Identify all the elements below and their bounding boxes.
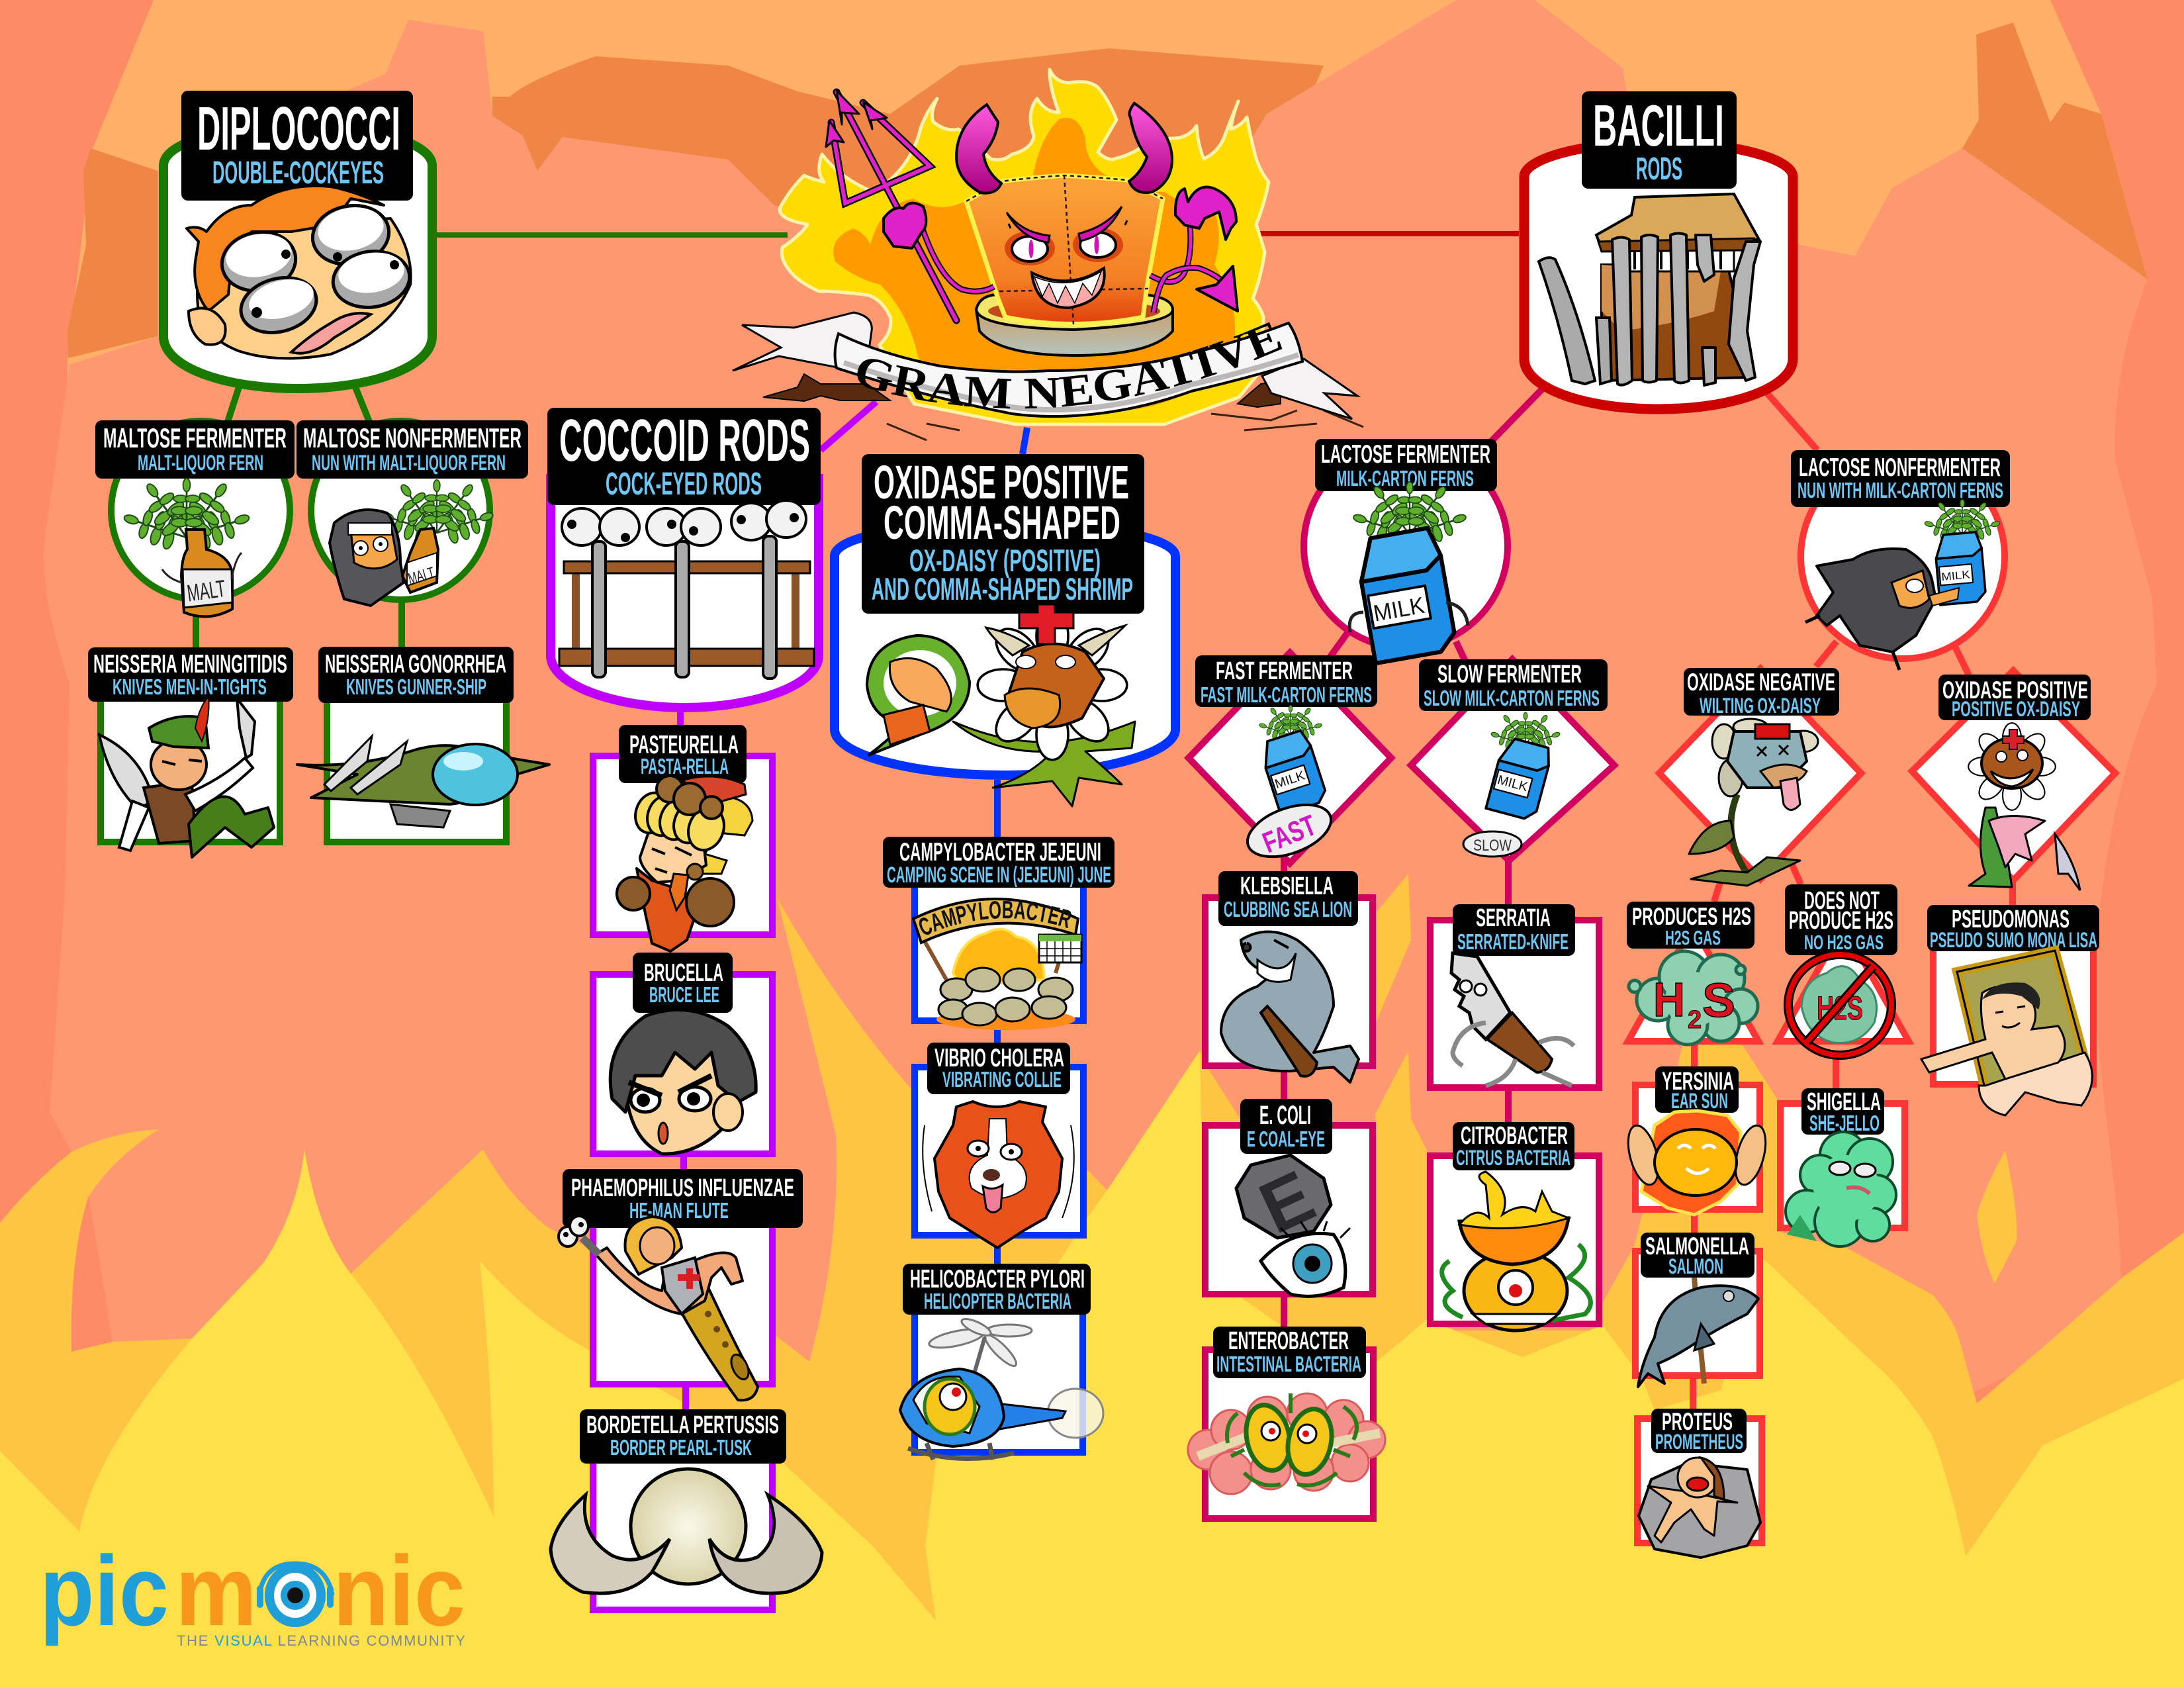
tail <box>1154 267 1224 312</box>
label: PSEUDOMONAS <box>1952 906 2070 933</box>
label <box>88 647 293 702</box>
icon: camp fire with banner and calendar: CAMPYLOBACTER <box>919 901 1071 935</box>
label <box>1315 439 1497 491</box>
eyes <box>1005 207 1127 265</box>
label: VIBRIO CHOLERA <box>934 1044 1064 1072</box>
panel: coccoid rods <box>547 408 821 708</box>
ground cracks thin <box>887 410 1363 440</box>
label <box>1641 1233 1754 1278</box>
heading: coccoid rods <box>547 408 821 505</box>
label: PASTEURELLA <box>629 731 739 759</box>
heading: oxidase positive comma-shaped: AND COMMA-SHAPED SHRIMP <box>872 571 1133 606</box>
icon: h2s gas cloud: H <box>1653 974 1685 1027</box>
panel: oxidase negative <box>1659 668 1861 886</box>
label: PHAEMOPHILUS INFLUENZAE <box>571 1174 794 1202</box>
panel: e. coli <box>1205 1099 1373 1296</box>
panel: oxidase positive comma-shaped <box>835 454 1175 806</box>
icon: sea lion with club <box>1221 932 1359 1082</box>
label: NUN WITH MALT-LIQUOR FERN <box>312 451 506 475</box>
label <box>563 1169 803 1228</box>
label: CITRUS BACTERIA <box>1456 1146 1570 1170</box>
icon: ear sun <box>1623 1111 1771 1215</box>
label: MILK-CARTON FERNS <box>1336 466 1474 491</box>
label <box>1453 1122 1574 1170</box>
frying pan <box>976 310 1173 355</box>
logo: picmonic <box>40 1535 465 1649</box>
sponge body <box>966 175 1163 324</box>
arms and hands <box>923 224 1191 291</box>
panel: fast fermenter <box>1189 653 1391 867</box>
frame <box>1637 1419 1762 1543</box>
panel: pasteurella <box>593 725 772 951</box>
label: CAMPING SCENE IN (JEJEUNI) JUNE <box>887 863 1111 888</box>
circle frame <box>1801 455 2005 659</box>
icon: cross-eyed rods in a rack <box>559 500 814 679</box>
label: SERRATED-KNIFE <box>1457 929 1569 954</box>
banner text path <box>852 346 1289 408</box>
triangle frame <box>1628 925 1758 1041</box>
label: NO H2S GAS <box>1804 931 1884 954</box>
heading: bacilli: RODS <box>1636 152 1682 187</box>
logo: picmonic: pic <box>40 1535 169 1646</box>
frame <box>1205 898 1373 1066</box>
icon: no h2s sign: H2S <box>1817 990 1863 1027</box>
icon: coal and eye: E <box>1248 1155 1326 1249</box>
barrel frame <box>1524 142 1793 409</box>
trident <box>831 92 956 320</box>
label: BRUCELLA <box>644 959 723 987</box>
frame <box>327 692 506 842</box>
barrel frame <box>835 523 1175 775</box>
label <box>1938 675 2091 721</box>
label <box>580 1409 786 1464</box>
label: OXIDASE NEGATIVE <box>1687 669 1835 696</box>
icon: robin hood with knives <box>99 696 274 857</box>
panel: serratia <box>1430 904 1599 1088</box>
mouth <box>1032 268 1105 308</box>
icon: nun with malt bottle and fern <box>330 476 498 606</box>
panel: maltose nonfermenter <box>296 420 528 606</box>
icon: pearl with tusks <box>551 1469 822 1593</box>
label: PROMETHEUS <box>1655 1430 1743 1454</box>
label <box>1684 668 1839 718</box>
label: CAMPYLOBACTER JEJEUNI <box>899 838 1101 867</box>
frame <box>593 974 772 1154</box>
label: CITROBACTER <box>1461 1122 1568 1150</box>
label: HELICOBACTER PYLORI <box>910 1265 1085 1293</box>
icon: intestinal bacteria <box>1188 1393 1385 1494</box>
icon: fast milk carton <box>1240 703 1338 867</box>
frame <box>1780 1103 1905 1228</box>
frame <box>915 1307 1083 1452</box>
heading: diplococci: DIPLOCOCCI <box>197 94 400 163</box>
label: WILTING OX-DAISY <box>1700 694 1821 718</box>
label: PRODUCES H2S <box>1632 903 1751 930</box>
label <box>1195 655 1377 707</box>
ribbon tails <box>733 312 1357 419</box>
heading: diplococci <box>181 91 413 201</box>
label: HE-MAN FLUTE <box>629 1198 729 1223</box>
label <box>1791 450 2010 507</box>
triangle frame <box>1778 925 1909 1041</box>
panel: phaemophilus influenzae <box>559 1169 803 1400</box>
icon: fast milk carton: MILK <box>1273 769 1307 792</box>
label <box>1785 884 1897 955</box>
label: BORDER PEARL-TUSK <box>610 1435 752 1460</box>
icon: wilting ox-daisy <box>1689 719 1818 886</box>
label: POSITIVE OX-DAISY <box>1952 697 2080 721</box>
label: DOES NOT <box>1804 887 1880 915</box>
frame <box>593 1201 772 1384</box>
panel: pseudomonas <box>1921 905 2099 1115</box>
label <box>1651 1408 1747 1454</box>
panel: salmonella <box>1635 1233 1760 1387</box>
label: PRODUCE H2S <box>1789 907 1893 935</box>
trident prongs <box>826 91 887 147</box>
label: SALMON <box>1668 1254 1723 1278</box>
heading: diplococci: DOUBLE-COCKEYES <box>212 156 384 191</box>
label: NEISSERIA MENINGITIDIS <box>93 650 287 679</box>
panel: helicobacter pylori <box>900 1264 1103 1460</box>
icon: citrus bacterium <box>1442 1172 1590 1331</box>
label: KLEBSIELLA <box>1240 872 1334 900</box>
label <box>1218 871 1358 926</box>
frame <box>101 692 280 842</box>
panel: campylobacter jejeuni <box>883 837 1115 1030</box>
frame <box>1635 1085 1760 1209</box>
icon: slow milk carton: MILK <box>1496 773 1529 794</box>
label: EAR SUN <box>1671 1089 1728 1113</box>
panel: brucella <box>593 953 772 1154</box>
icon: camp fire with banner and calendar <box>912 898 1083 1030</box>
label: FAST MILK-CARTON FERNS <box>1201 682 1372 707</box>
icon: malt liquor bottle with fern: MALT <box>185 575 227 607</box>
panel: shigella <box>1780 1088 1905 1246</box>
panel: citrobacter <box>1430 1122 1599 1331</box>
frame <box>1933 940 2093 1084</box>
label <box>1927 905 2099 952</box>
icon: coal and eye <box>1236 1155 1350 1296</box>
icon: milk carton with fern: MILK <box>1371 592 1426 627</box>
label: SERRATIA <box>1476 904 1551 932</box>
panel: enterobacter <box>1188 1327 1385 1519</box>
icon: vibrating collie <box>923 1102 1074 1248</box>
frame <box>1635 1251 1760 1376</box>
panel: klebsiella <box>1205 871 1373 1082</box>
label: PROTEUS <box>1662 1408 1733 1435</box>
icon: she-jello <box>1786 1132 1896 1246</box>
label: H2S GAS <box>1665 926 1721 949</box>
icon: salmon <box>1638 1278 1758 1387</box>
label: SALMONELLA <box>1645 1233 1749 1260</box>
label <box>1801 1088 1884 1135</box>
label: SHE-JELLO <box>1809 1111 1880 1135</box>
icon: eye with headphones <box>257 1564 334 1627</box>
label <box>883 837 1115 888</box>
panel: proteus <box>1637 1408 1762 1558</box>
heading: bacilli: BACILLI <box>1593 93 1724 158</box>
label <box>927 1043 1070 1094</box>
label: MALTOSE NONFERMENTER <box>303 422 522 453</box>
label: OXIDASE POSITIVE <box>1942 677 2088 704</box>
label <box>1213 1327 1366 1378</box>
panel: does not produce h2s <box>1778 884 1909 1055</box>
panel: lactose nonfermenter <box>1791 450 2010 670</box>
diamond frame <box>1189 653 1391 863</box>
icon: milk carton with fern <box>1349 478 1471 663</box>
icon: h2s gas cloud <box>1629 951 1758 1045</box>
label <box>1453 904 1575 956</box>
panel: oxidase positive (bacilli branch) <box>1912 671 2115 890</box>
logo: picmonic: nic <box>333 1535 465 1646</box>
label: KNIVES GUNNER-SHIP <box>346 675 486 699</box>
label <box>1419 659 1608 711</box>
label <box>1655 1066 1739 1113</box>
panel: neisseria meningitidis <box>88 647 293 857</box>
diamond frame <box>1912 671 2115 880</box>
icon: pasta rella woman <box>617 776 752 951</box>
label: HELICOPTER BACTERIA <box>924 1289 1071 1313</box>
label <box>296 420 528 479</box>
banner shadow <box>844 355 1298 410</box>
icon: malt liquor bottle with fern <box>119 475 254 616</box>
label: VIBRATING COLLIE <box>942 1067 1062 1092</box>
frame <box>593 756 772 935</box>
label <box>619 725 747 783</box>
diamond frame <box>1411 659 1614 861</box>
icon: bruce lee head <box>610 1009 756 1154</box>
circle frame <box>1304 444 1508 648</box>
icon: serrated knife character <box>1451 953 1574 1086</box>
heading: oxidase positive comma-shaped: COMMA-SHAPED <box>884 497 1120 549</box>
label: LACTOSE FERMENTER <box>1321 440 1490 469</box>
icon: he-man flute <box>559 1216 758 1400</box>
icon: running nun with milk carton <box>1805 497 2003 670</box>
label: CLUBBING SEA LION <box>1224 897 1352 921</box>
label: NEISSERIA GONORRHEA <box>325 650 506 679</box>
heading: bacilli <box>1582 91 1737 189</box>
label: E. COLI <box>1259 1101 1311 1130</box>
panel: maltose fermenter <box>95 420 295 616</box>
ground cracks <box>763 374 1281 407</box>
label: SLOW MILK-CARTON FERNS <box>1424 686 1600 710</box>
label: MALTOSE FERMENTER <box>103 422 287 453</box>
icon: fast milk carton: FAST <box>1258 809 1321 859</box>
barrel frame <box>163 126 432 389</box>
panel: diplococci <box>163 91 432 389</box>
icon: slow milk carton: SLOW <box>1473 837 1512 855</box>
label: FAST FERMENTER <box>1216 657 1353 685</box>
title character: gram negative devil sponge: GRAM NEGATIVE <box>858 322 1283 409</box>
label: SHIGELLA <box>1807 1088 1881 1116</box>
circle frame <box>111 421 290 600</box>
frame <box>1430 1156 1599 1324</box>
panel: lactose fermenter <box>1304 439 1508 663</box>
label: E COAL-EYE <box>1247 1127 1325 1151</box>
icon: running nun with milk carton: MILK <box>1941 568 1970 583</box>
icon: double cross-eyed face <box>187 186 413 358</box>
icon: nun with malt bottle and fern: MALT <box>406 564 437 588</box>
frame <box>915 1067 1083 1235</box>
logo: picmonic: THE VISUAL LEARNING COMMUNITY <box>177 1632 465 1649</box>
label <box>318 647 514 703</box>
horns <box>956 105 1001 193</box>
diamond frame <box>1659 669 1861 879</box>
panel: vibrio cholera <box>915 1043 1083 1248</box>
panel: neisseria gonorrhea <box>297 647 549 842</box>
panel: bacilli <box>1524 91 1793 409</box>
icon: h2s gas cloud: 2 <box>1688 1006 1702 1034</box>
fire behind character <box>780 70 1269 424</box>
label <box>1627 902 1754 949</box>
circle frame <box>311 421 490 600</box>
panel: produces h2s <box>1627 902 1758 1045</box>
icon: helicopter with bacterium <box>900 1316 1103 1460</box>
label <box>1240 1099 1332 1154</box>
icon: smiling daisy with hand <box>1968 723 2080 890</box>
label: MALT-LIQUOR FERN <box>138 451 263 475</box>
icon: h2s gas cloud: S <box>1702 974 1735 1027</box>
label: LACTOSE NONFERMENTER <box>1799 453 2001 482</box>
label: INTESTINAL BACTERIA <box>1216 1352 1361 1376</box>
label: YERSINIA <box>1662 1068 1734 1096</box>
barrel frame <box>551 479 819 708</box>
icon: slow milk carton <box>1463 710 1563 857</box>
label: PASTA-RELLA <box>641 754 729 778</box>
frame <box>593 1453 772 1610</box>
frame <box>1430 920 1599 1088</box>
frame <box>1205 1350 1373 1519</box>
heading: oxidase positive comma-shaped: OXIDASE POSITIVE <box>874 457 1129 509</box>
heading: oxidase positive comma-shaped <box>862 454 1144 614</box>
logo: picmonic: m <box>175 1535 257 1646</box>
icon: prometheus on rock <box>1639 1458 1760 1558</box>
frame <box>915 880 1083 1021</box>
label: ENTEROBACTER <box>1228 1327 1349 1355</box>
label <box>95 420 295 479</box>
label: SLOW FERMENTER <box>1437 661 1582 688</box>
frame <box>1205 1125 1373 1294</box>
icon: comma shrimp and ox-daisy <box>867 604 1135 806</box>
label: BORDETELLA PERTUSSIS <box>586 1411 779 1439</box>
heading: coccoid rods: COCK-EYED RODS <box>606 467 762 502</box>
title character: gram negative devil sponge <box>732 68 1363 441</box>
icon: broken rods cage <box>1539 194 1760 385</box>
icon: sumo mona lisa <box>1921 951 2092 1115</box>
label: BRUCE LEE <box>649 982 719 1007</box>
panel: yersinia <box>1623 1066 1771 1215</box>
label <box>633 953 733 1013</box>
icon: no h2s sign <box>1788 955 1891 1055</box>
label <box>903 1264 1091 1315</box>
label: NUN WITH MILK-CARTON FERNS <box>1797 478 2003 502</box>
heading: oxidase positive comma-shaped: OX-DAISY (POSITIVE) <box>909 543 1101 578</box>
panel: bordetella pertussis <box>551 1409 822 1610</box>
heading: coccoid rods: COCCOID RODS <box>559 408 810 474</box>
ribbon main <box>835 323 1302 416</box>
connector lines <box>196 234 2013 1410</box>
icon: knife gunner ship <box>297 736 549 827</box>
panel: slow fermenter <box>1411 659 1614 861</box>
label: KNIVES MEN-IN-TIGHTS <box>113 675 267 699</box>
